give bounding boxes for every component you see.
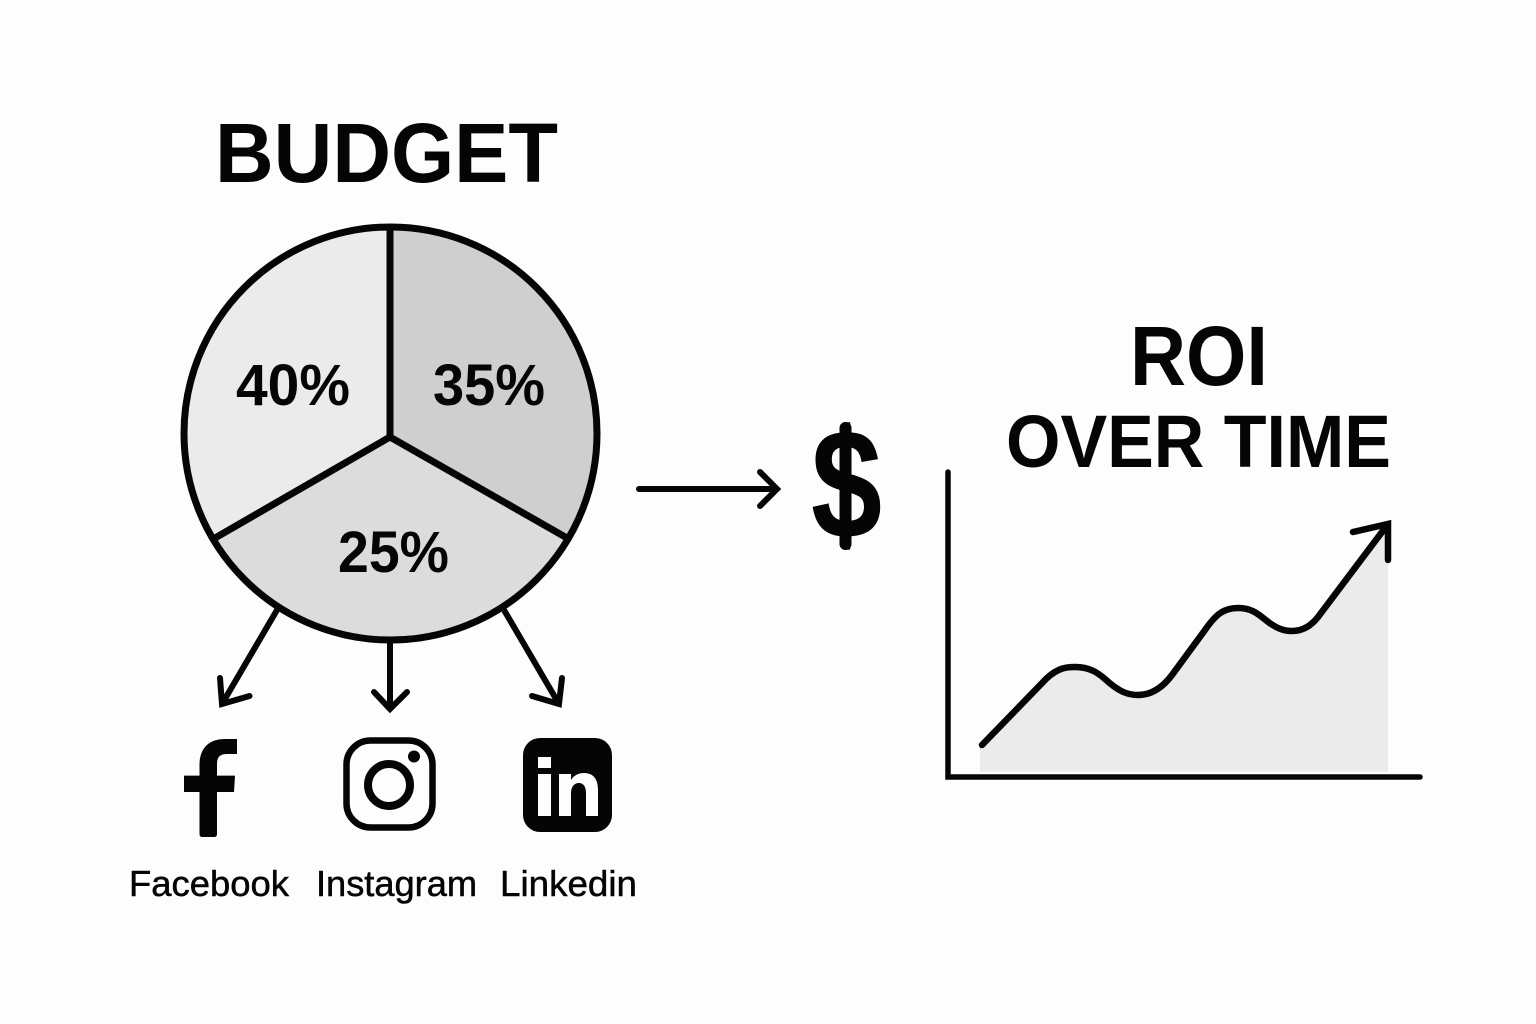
icon: dollar sign: $ <box>811 398 882 572</box>
label: Instagram: Instagram <box>316 863 477 904</box>
arrow: budget to dollar <box>639 472 777 506</box>
line chart <box>948 472 1420 777</box>
label: LinkedIn: Linkedin <box>500 863 637 904</box>
trend line arrow <box>982 524 1388 745</box>
pie chart <box>184 227 597 640</box>
slice dividers <box>215 227 567 538</box>
label: 35%: 35% <box>433 353 545 418</box>
area fill <box>980 524 1388 772</box>
axes <box>948 472 1420 777</box>
slice: 25% <box>215 437 567 636</box>
slice: 40% <box>187 227 390 538</box>
label: 25%: 25% <box>338 520 449 585</box>
arrow: to LinkedIn <box>504 610 562 704</box>
title: ROI: ROI <box>1130 309 1268 403</box>
arrow: to Facebook <box>220 610 277 704</box>
icon: LinkedIn <box>523 738 612 832</box>
title: over time: OVER TIME <box>1006 400 1391 483</box>
label: 40%: 40% <box>236 353 350 418</box>
title: budget: BUDGET <box>215 106 558 200</box>
arrow: to Instagram <box>374 643 407 709</box>
label: Facebook: Facebook <box>129 863 290 904</box>
icon: Facebook <box>184 739 237 837</box>
icon: Instagram <box>346 740 432 828</box>
pie outline <box>184 227 597 640</box>
slice: 35% <box>390 227 595 538</box>
